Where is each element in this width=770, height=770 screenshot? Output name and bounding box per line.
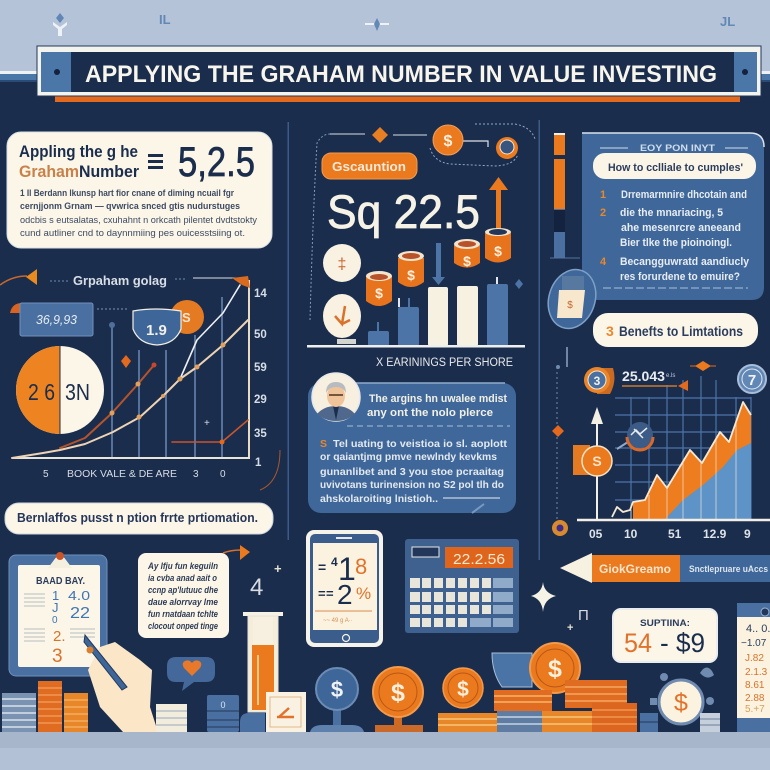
x axis labels (589, 527, 751, 541)
text note card: Ay lfju fun keguiln (147, 561, 218, 571)
x axis labels: 5 (43, 469, 49, 480)
arrow: note to right (223, 545, 250, 560)
x axis labels: 51 (668, 527, 682, 541)
value tag: 36,9,93 (36, 312, 78, 327)
ribbon label (560, 553, 770, 583)
decorative symbols: + (274, 561, 282, 576)
panel: intro card (7, 132, 272, 248)
clipboard icon: BAAD BAY. (36, 576, 85, 587)
text note card: ccnp ap'lutuuc dhe (148, 585, 218, 595)
card body text: 1 Il Berdann lkunsp hart fior cnane of diming ncuail fgr (20, 188, 234, 199)
blue area (667, 443, 751, 519)
side pillar (550, 133, 580, 258)
icons: top decorative marks: IL (159, 12, 171, 27)
equation circles: ‡ (338, 256, 346, 273)
y axis labels: 14 (254, 288, 267, 300)
pie chart (16, 346, 104, 434)
orange area (633, 402, 751, 519)
value readout: 25.043 (622, 368, 665, 384)
y axis labels (254, 288, 267, 469)
panel: calculation column (307, 124, 535, 513)
quote body: Tel uating to veistioa io sl. aoplott (333, 438, 508, 450)
icon: blue dollar medal: $ (331, 677, 343, 702)
text note card (138, 553, 229, 638)
ribbon label: GiokGreamo (599, 562, 671, 576)
card heading: Number (79, 162, 139, 181)
value readout: 3 (594, 374, 601, 388)
magnifier (617, 422, 653, 450)
tablet icon: 4 (331, 555, 338, 569)
value readout (584, 361, 716, 394)
clipboard icon: 3 (52, 646, 63, 667)
text note card: clocout onped tinge (148, 621, 218, 631)
chart title (0, 269, 243, 288)
callout pill: left (5, 503, 273, 534)
card body text: odcbis s eutsalatas, cxuhahnt n orkcath pilentet dvdtstokty (20, 215, 257, 226)
pie chart: 2 6 (28, 379, 55, 405)
x axis labels: 3 (193, 469, 199, 480)
side note card: 8.61 (745, 680, 765, 691)
numbered list: 1 (600, 189, 606, 201)
coin stacks: right (438, 680, 658, 732)
orange label pill (322, 153, 417, 179)
x axis labels: 0 (220, 469, 226, 480)
formula value: Sq 22.5 (327, 185, 480, 238)
panel subheading pill (593, 153, 756, 179)
coin badge: 1.9 (146, 322, 167, 339)
coin stacks: left (2, 681, 88, 732)
tablet icon: 8 (355, 554, 367, 579)
flag coin (573, 445, 612, 476)
top connector ornaments: $ (444, 133, 453, 150)
bar chart (307, 243, 525, 348)
numbered list (600, 189, 750, 283)
flag coin: S (592, 453, 602, 469)
number coin (738, 365, 766, 393)
quote body: or qaiantjmg pmve newlndy kevkms (320, 451, 497, 463)
text note card: fun rnatdaan tchlte (148, 609, 218, 619)
top connector ornaments (310, 124, 535, 320)
decorative symbols: 4 (250, 574, 263, 601)
quote body (320, 438, 508, 505)
side note card: 2.88 (745, 693, 765, 704)
tablet icon: = (326, 586, 334, 601)
quote body: ahskolaroiting lnistioh.. (320, 493, 438, 505)
title banner (37, 46, 761, 102)
decorative symbols: + (567, 622, 573, 634)
series lines (12, 285, 248, 458)
up arrow (591, 407, 603, 520)
x axis labels: 05 (589, 527, 603, 541)
card body text (20, 188, 257, 239)
tablet icon: % (356, 584, 371, 603)
quote heading: any ont the nolo plerce (367, 407, 493, 419)
callout pill: left: Bernlaffos pusst n ption frrte prtiomation. (17, 511, 258, 525)
chart: area chart (552, 347, 770, 541)
icon: orange dollar medal: $ (391, 679, 405, 707)
benefits pill: 3 (606, 323, 614, 339)
grid lines (112, 297, 222, 458)
quote body: uvivotans turinension no S2 pol tlh do (320, 479, 504, 491)
equals sign (148, 154, 163, 169)
decorative symbols: Π (578, 607, 589, 624)
chart title: Grpaham golag (73, 274, 167, 288)
icon: angle card (266, 692, 306, 732)
benefits pill: Benefts to Limtations (619, 323, 743, 339)
side note card: J.82 (745, 653, 764, 664)
side note card: 4.. 0. (746, 623, 770, 635)
x axis labels: 12.9 (703, 527, 727, 541)
side note card: 5.+7 (745, 704, 765, 715)
icon: round note badge (541, 263, 603, 335)
clipboard icon: J (52, 600, 58, 615)
value readout: e.ls (666, 373, 675, 379)
card heading: Graham (19, 162, 79, 181)
y axis labels: 35 (254, 428, 267, 440)
icon: orange coin (443, 668, 483, 708)
test tube icon (240, 612, 283, 732)
quote heading (367, 393, 507, 419)
x axis labels: 10 (624, 527, 638, 541)
decorative symbols (250, 561, 589, 634)
clipboard icon: 4.0 (68, 588, 90, 603)
portrait icon (312, 373, 360, 421)
heart speech bubble (167, 657, 215, 691)
pie chart: 3N (65, 379, 90, 405)
blue pouch (492, 653, 532, 687)
quote heading: The argins hn uwalee mdist (369, 393, 507, 405)
clipboard icon (9, 552, 107, 676)
icon: orange coin: $ (457, 678, 469, 701)
icon: round note badge: $ (567, 300, 573, 311)
numbered list: die the mnariacing, 5 (620, 207, 723, 219)
value tag (10, 303, 127, 336)
number coin: 7 (748, 372, 756, 389)
chart: Graham line chart (0, 269, 280, 490)
side note card: −1.07 (741, 638, 767, 649)
illustration: hand with pen (84, 635, 158, 732)
card body text: cund autliner cnd to daynnmiing pes ouicesstsiing ot. (20, 228, 245, 239)
icon: blue dollar medal (310, 668, 364, 732)
clipboard icon: 0 (52, 615, 58, 626)
numbered list: ahe mesenrcre aneeand (621, 222, 741, 234)
numbered list: Bier tlke the pioinoingl. (620, 237, 732, 249)
coin cylinders: $ (375, 285, 383, 301)
icons: top decorative marks: JL (720, 14, 735, 29)
icon: cream dollar disc: $ (674, 689, 688, 717)
tablet icon (306, 530, 383, 647)
data points (110, 342, 226, 444)
icon: cream dollar disc (650, 667, 720, 732)
icon: orange dollar medal (373, 667, 423, 732)
quote body: S (320, 438, 327, 450)
side note card: 2.1.3 (745, 667, 768, 678)
panel eyebrow: EOY PON INYT (640, 143, 716, 153)
card heading (19, 142, 139, 181)
numbered list: Becangguwratd aandiucly (620, 256, 750, 268)
tablet icon: 1 (338, 551, 356, 587)
y axis labels: 59 (254, 362, 267, 374)
numbered list: 4 (600, 256, 607, 268)
icon: large orange coin (530, 643, 580, 693)
price callout: - $9 (660, 628, 705, 658)
tablet icon: = (318, 559, 326, 575)
price callout (613, 609, 717, 662)
clipboard icon: 1 (52, 588, 59, 603)
y axis labels: 50 (254, 329, 267, 341)
coin cylinders (366, 228, 511, 306)
panel: how to calculate (550, 133, 764, 300)
tablet icon: 2 (337, 579, 353, 610)
tablet icon: ~~ 49 g A·· (323, 618, 353, 624)
area gridlines (631, 420, 736, 519)
x axis labels: 9 (744, 527, 751, 541)
x axis caption: X EARININGS PER SHORE (376, 357, 513, 369)
area outline (612, 402, 751, 517)
icons: top decorative marks (53, 12, 735, 36)
numbered list: 2 (600, 207, 606, 219)
calculator icon: 22.2.56 (453, 551, 505, 568)
calculator icon (405, 539, 519, 633)
card body text: cernjjonm Grnam — qvwrica snced gtis nudurstuges (20, 201, 240, 212)
x axis labels: BOOK VALE & DE ARE (67, 469, 177, 480)
chart: Graham line chart: + (204, 418, 210, 429)
coin row (310, 643, 658, 732)
coin badge: S (182, 310, 191, 325)
quote body: gunanlibet and 3 you stoe pcraaitag (320, 466, 504, 478)
numbered list: Drremarmnire dhcotain and (621, 189, 747, 201)
clipboard icon: 22 (70, 605, 90, 622)
title text: APPLYING THE GRAHAM NUMBER IN VALUE INVESTING (85, 61, 717, 88)
price callout: 54 (624, 628, 652, 658)
coin cylinders: $ (407, 267, 415, 283)
coin stacks: middle: 0 (220, 700, 226, 710)
icon: large orange coin: $ (548, 655, 562, 683)
x axis labels (43, 469, 226, 480)
quote bubble (308, 383, 516, 513)
axis (248, 280, 250, 459)
coin stacks: middle (156, 695, 239, 732)
orange label pill: Gscauntion (332, 160, 406, 174)
side note card (737, 603, 770, 732)
coin cylinders: $ (494, 243, 502, 259)
coin cylinders: $ (463, 253, 471, 269)
panel subheading pill: How to cclliale to cumples' (608, 162, 743, 174)
headline value: 5,2.5 (178, 138, 255, 185)
grid (615, 376, 751, 519)
y axis labels: 29 (254, 394, 267, 406)
equation circles (323, 244, 361, 344)
numbered list: res forurdene to emuire? (620, 271, 740, 283)
clipboard icon: 2. (53, 628, 66, 645)
text note card: ia cvba anad aait o (148, 573, 217, 583)
benefits pill (593, 313, 758, 347)
y axis labels: 1 (255, 457, 262, 469)
coin badge (133, 300, 204, 345)
tablet icon: = (318, 586, 326, 601)
dotted guide (552, 347, 567, 520)
card heading: Appling the g he (19, 142, 138, 161)
price callout: SUPTIINA: (640, 618, 690, 629)
text note card: daue alorrvay lme (148, 597, 218, 607)
arrow up (489, 177, 508, 230)
